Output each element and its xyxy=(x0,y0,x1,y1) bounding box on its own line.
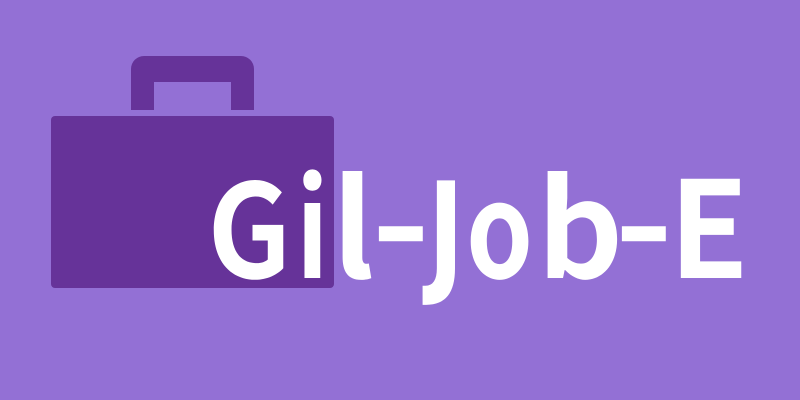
title: Gil-Job-E: - xyxy=(614,111,674,315)
icon: briefcase xyxy=(51,56,334,288)
title: Gil-Job-E: G xyxy=(208,127,291,316)
title: Gil-Job-E: l xyxy=(332,123,374,317)
title: Gil-Job-E: E xyxy=(669,124,749,318)
icon: briefcase body xyxy=(51,116,334,288)
title: Gil-Job-E: J xyxy=(422,154,464,310)
title: Gil-Job-E: - xyxy=(371,111,431,315)
title: Gil-Job-E: i xyxy=(296,122,329,317)
title: Gil-Job-E xyxy=(208,111,749,318)
title: Gil-Job-E: b xyxy=(537,123,623,317)
title: Gil-Job-E: o xyxy=(466,126,533,316)
icon: briefcase handle xyxy=(131,56,254,110)
